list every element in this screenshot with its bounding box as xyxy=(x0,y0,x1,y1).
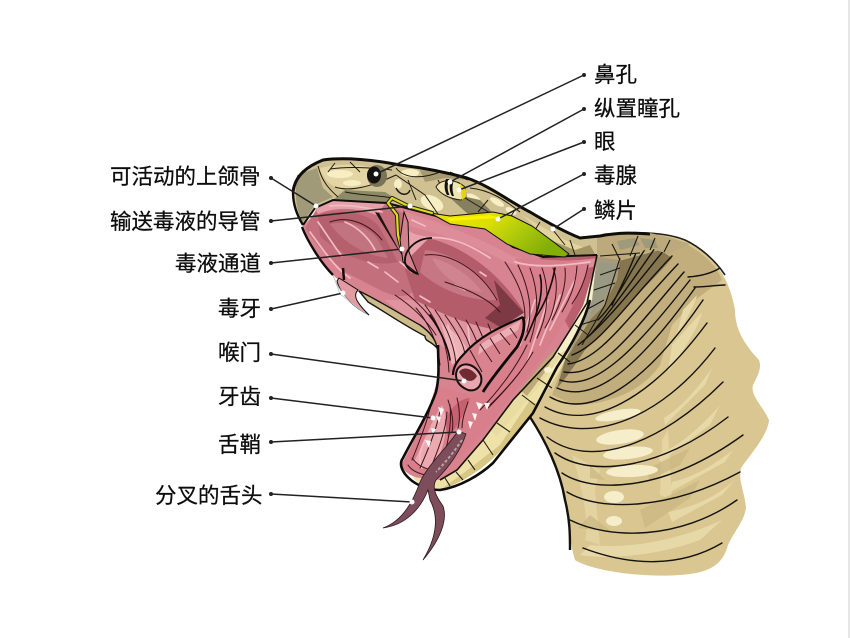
leader line: movable maxilla xyxy=(269,176,318,208)
palate right xyxy=(405,237,526,335)
leader line: forked tongue xyxy=(269,492,414,504)
icon: nostril xyxy=(367,165,387,187)
cream lower jaw scales xyxy=(401,254,597,490)
label: venom duct: 输送毒液的导管 xyxy=(110,210,261,234)
leader line: venom gland xyxy=(496,172,586,222)
leader line: teeth xyxy=(269,396,436,420)
forked tongue xyxy=(383,431,466,560)
collar scales xyxy=(530,233,690,412)
head plate xyxy=(293,159,650,257)
label: scales: 鳞片 xyxy=(594,199,637,223)
label: tongue sheath: 舌鞘 xyxy=(218,433,261,457)
label: eye: 眼 xyxy=(594,130,616,154)
venom duct xyxy=(388,198,432,250)
leader line: scales xyxy=(550,207,586,232)
label: fang: 毒牙 xyxy=(218,297,261,321)
label: venom canal: 毒液通道 xyxy=(175,252,261,276)
leader line: venom canal xyxy=(269,246,404,265)
label: movable maxilla: 可活动的上颌骨 xyxy=(110,165,261,189)
upper lip muscle band xyxy=(540,256,597,330)
label: vertical pupil: 纵置瞳孔 xyxy=(594,97,680,121)
upper lip gum xyxy=(302,227,437,348)
label: nostril: 鼻孔 xyxy=(594,63,637,87)
leader line: tongue sheath xyxy=(269,430,462,444)
leader line: vertical pupil xyxy=(448,107,586,184)
leader line: fang xyxy=(269,290,346,311)
upper fangs xyxy=(333,212,432,315)
lower jaw floor xyxy=(403,355,535,475)
venom gland xyxy=(430,212,569,257)
mouth interior xyxy=(302,198,597,482)
neck xyxy=(530,233,769,576)
leader line: venom duct xyxy=(269,204,412,223)
leader line: nostril xyxy=(374,73,586,176)
palate left xyxy=(305,201,416,296)
label: glottis: 喉门 xyxy=(218,341,261,365)
leader line: eye xyxy=(456,140,586,192)
lower teeth xyxy=(425,402,490,448)
fan of muscle xyxy=(385,258,575,405)
label: venom gland: 毒腺 xyxy=(594,164,637,188)
label: forked tongue: 分叉的舌头 xyxy=(155,484,263,508)
glottis tube xyxy=(453,317,524,392)
icon: eye with vertical pupil xyxy=(436,179,466,200)
leader line: glottis xyxy=(269,352,466,384)
label: teeth: 牙齿 xyxy=(218,385,261,409)
